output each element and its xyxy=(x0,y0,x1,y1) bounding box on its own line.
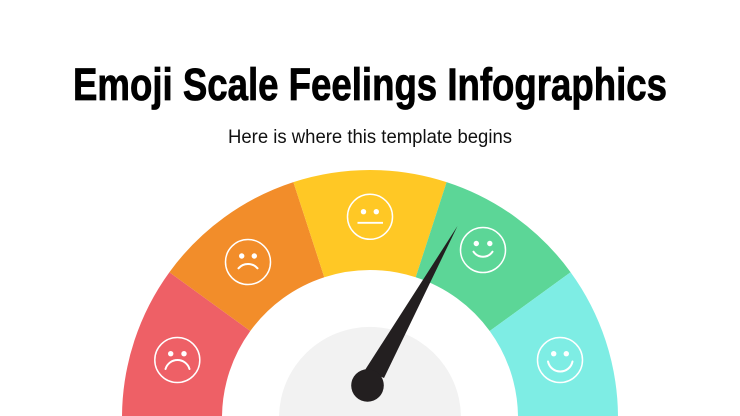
segment: green xyxy=(416,182,571,331)
icon: very sad face xyxy=(155,338,200,382)
segment: orange xyxy=(169,182,324,331)
icon: happy face xyxy=(460,228,506,272)
segment: yellow xyxy=(293,170,447,277)
icon: neutral face xyxy=(348,194,392,239)
subtitle: Here is where this template begins xyxy=(228,127,512,148)
segment: cyan xyxy=(490,272,618,416)
icon: sad face xyxy=(226,240,270,284)
needle pointer xyxy=(351,226,458,402)
gauge inner grey dial xyxy=(279,327,461,416)
segment: red xyxy=(122,272,250,416)
icon: very happy face xyxy=(538,338,582,382)
gauge: five coloured segments xyxy=(122,170,618,416)
